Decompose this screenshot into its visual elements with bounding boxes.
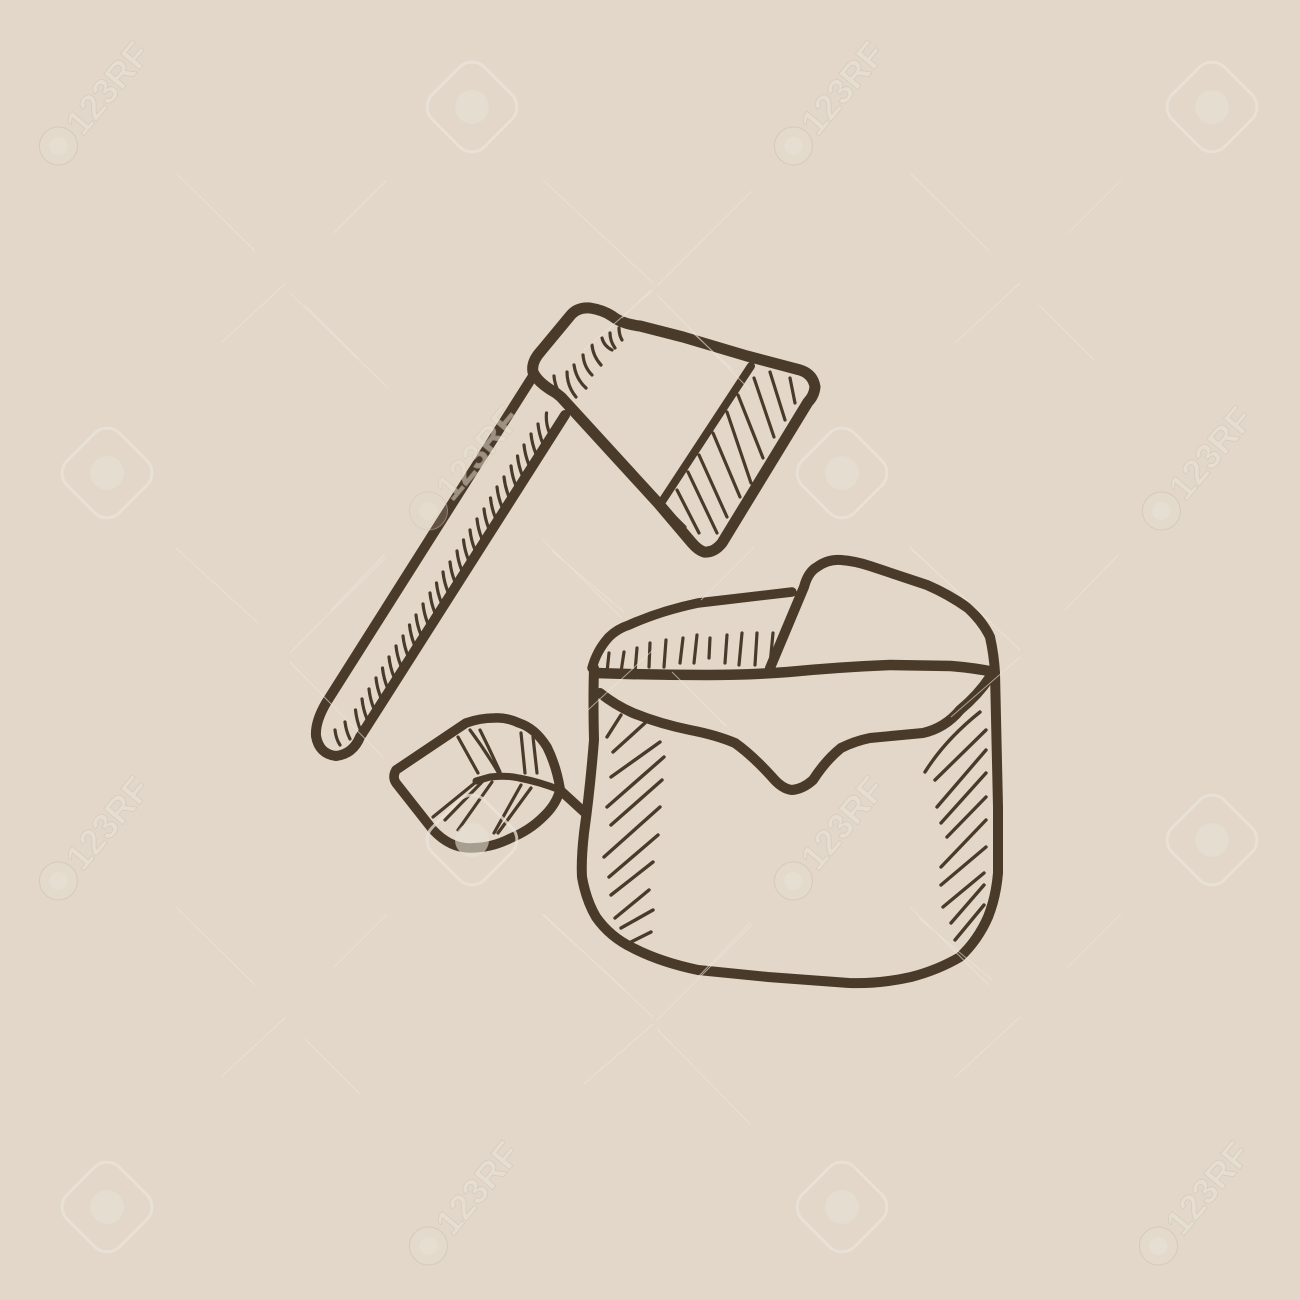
axe head hatching [554, 328, 795, 533]
watermark text bottom center left [401, 1133, 528, 1274]
watermark text top right [766, 33, 893, 174]
axe handle [316, 376, 565, 756]
stump rim line [596, 665, 994, 675]
watermark egg top center [420, 55, 524, 159]
leaf hatching [433, 730, 537, 833]
watermark text bottom right: 123RF [1157, 1133, 1258, 1243]
watermark egg bottom center right [790, 1155, 894, 1259]
icon: axe [316, 308, 815, 756]
leaf stem [560, 790, 584, 812]
leaf outline [394, 718, 560, 848]
stump right side hatching [925, 712, 986, 940]
icon: tree stump [582, 560, 998, 983]
stump body outline [582, 668, 998, 983]
watermark text over stump [766, 768, 893, 909]
watermark text top left [31, 33, 158, 174]
watermark text row three left: 123RF [57, 768, 158, 878]
watermark egg row two center [790, 421, 894, 525]
stump top hatching [607, 633, 773, 672]
watermark text row three left [31, 768, 158, 909]
stump back rim [592, 592, 792, 668]
watermark text over axe handle: 123RF [427, 398, 528, 508]
stump front bark lip [600, 677, 990, 790]
watermark text over axe handle [401, 398, 528, 539]
watermark egg over leaf [420, 788, 524, 892]
watermark text top left: 123RF [57, 33, 158, 143]
watermark egg bottom left [55, 1155, 159, 1259]
stump wedge cut [770, 560, 995, 673]
watermark text over stump: 123RF [792, 768, 893, 878]
watermark egg far right top [1160, 55, 1264, 159]
icon: leaf sprout [394, 718, 584, 848]
watermark egg row three right [1160, 788, 1264, 892]
leaf midrib [476, 776, 560, 790]
watermark text row two right [1134, 398, 1261, 539]
watermark text top right: 123RF [792, 33, 893, 143]
watermark text bottom right [1131, 1133, 1258, 1274]
axe head [533, 308, 815, 552]
watermark text bottom center left: 123RF [427, 1133, 528, 1243]
watermark egg row two left [55, 421, 159, 525]
axe handle hatching [335, 413, 550, 745]
watermark text row two right: 123RF [1160, 398, 1261, 508]
stump left side hatching [604, 715, 664, 942]
